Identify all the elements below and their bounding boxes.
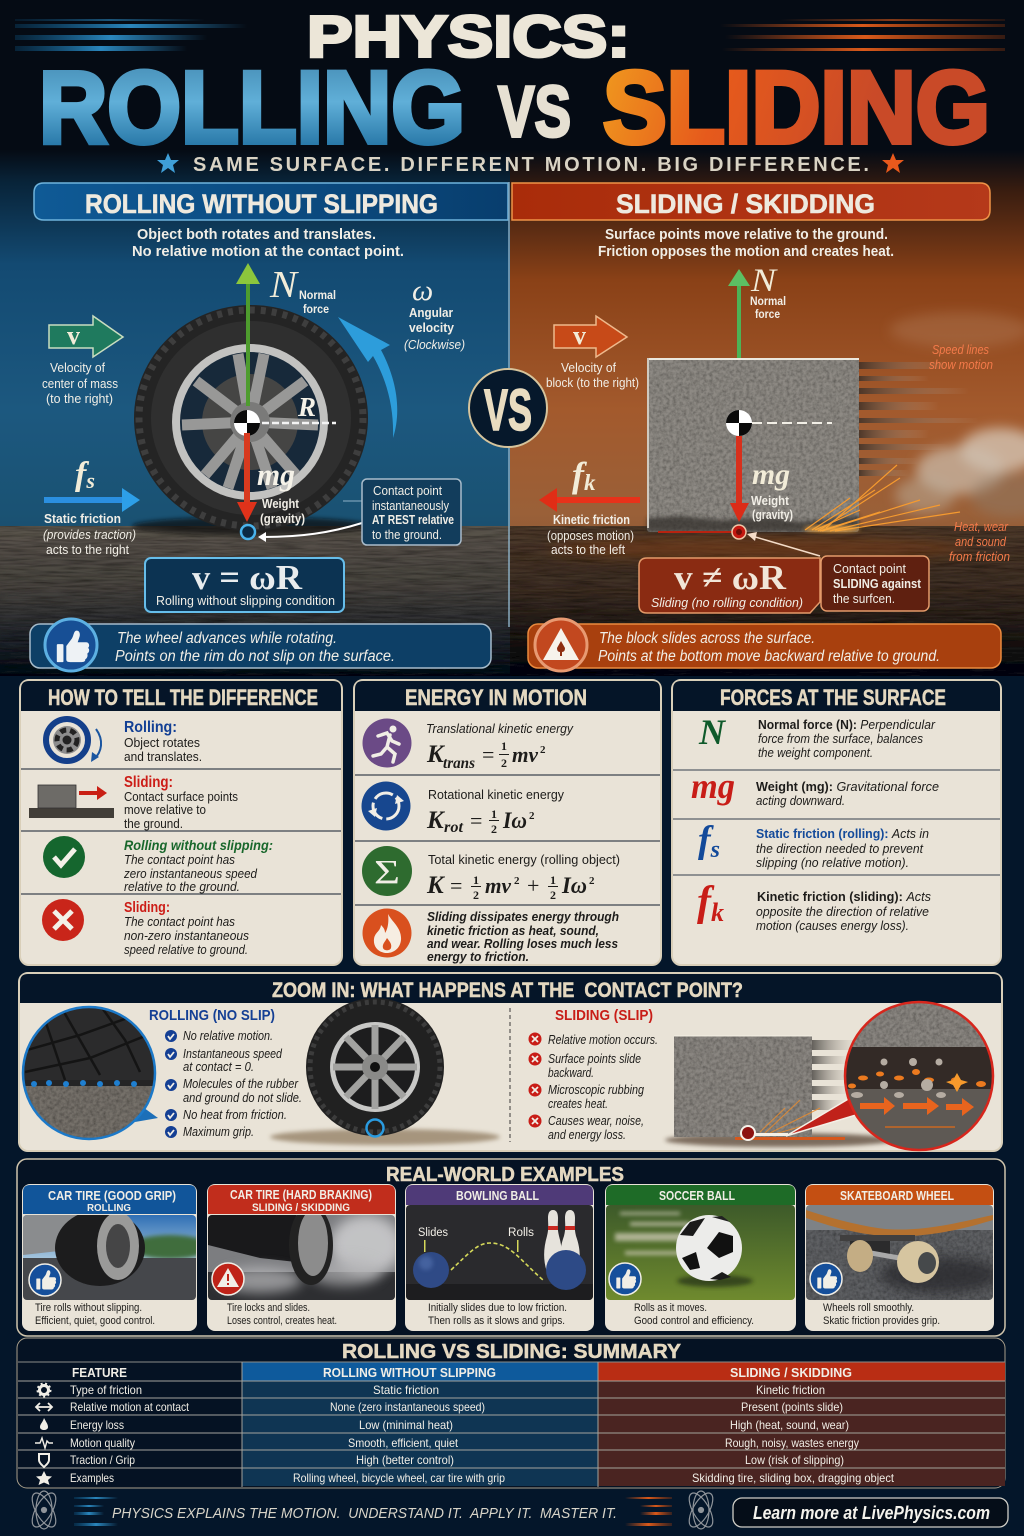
annotation: speed lines: Speed lines xyxy=(932,342,989,357)
text: sliding dissipates energy: and wear. Rolling loses much less xyxy=(427,936,618,951)
panel: rolling vs sliding summary table xyxy=(17,1338,1005,1488)
panel header: rolling without slipping xyxy=(34,183,508,220)
panel: rolling vs sliding summary table: ROLLING VS SLIDING: SUMMARY xyxy=(342,1341,682,1363)
table row: motion quality xyxy=(35,1436,859,1450)
force: weight: mg xyxy=(691,766,735,806)
contact marker and pointer xyxy=(741,1098,856,1140)
banner: block slides: The block slides across the surface. xyxy=(599,630,815,647)
hero background: rolling side xyxy=(0,150,510,676)
text: sliding: the ground. xyxy=(124,817,183,831)
table row: energy loss xyxy=(40,1418,849,1432)
annotation: heat and wear: Heat, wear xyxy=(954,519,1009,534)
panel: energy in motion xyxy=(354,680,661,965)
formula: translational kinetic energy: trans xyxy=(443,755,475,772)
callout: contact point sliding xyxy=(747,532,929,611)
list: sliding slip: SLIDING (SLIP) xyxy=(555,1007,653,1024)
arrow: normal force on block: Normal xyxy=(750,294,786,308)
arrow: normal force on wheel xyxy=(236,263,336,406)
title: SLIDING xyxy=(603,50,990,164)
annotation: speed lines xyxy=(929,342,993,372)
list: rolling no slip: ROLLING (NO SLIP) xyxy=(149,1007,275,1024)
force: normal: N xyxy=(698,712,727,752)
list: sliding slip: Causes wear, noise, xyxy=(548,1114,644,1128)
card: car tire good grip xyxy=(22,1184,210,1331)
callout: contact point at rest: to the ground. xyxy=(372,528,442,542)
list: sliding slip: Microscopic rubbing xyxy=(548,1083,644,1097)
arrow: velocity of block: v xyxy=(573,321,586,350)
table row: traction: Traction / Grip xyxy=(70,1453,135,1467)
footer: right atom xyxy=(685,1490,717,1530)
list: sliding slip xyxy=(528,1007,658,1142)
table header row: FEATURE xyxy=(72,1366,127,1380)
callout: contact point at rest: instantaneously xyxy=(372,499,450,513)
table row: relative motion: Relative motion at contact xyxy=(70,1400,190,1414)
list: rolling no slip: at contact = 0. xyxy=(183,1060,254,1074)
formula box: v not equal omega R: v ≠ ωR xyxy=(674,558,787,597)
card: car tire hard braking: Loses control, creates heat. xyxy=(227,1315,337,1327)
card: soccer ball: Rolls as it moves. xyxy=(634,1302,707,1314)
formula: rotational kinetic energy: Iω xyxy=(502,808,527,833)
formula: total kinetic energy: 2 xyxy=(514,875,520,887)
list: rolling no slip: No relative motion. xyxy=(183,1029,273,1043)
callout: contact point at rest xyxy=(258,479,461,545)
title: ROLLING xyxy=(39,50,465,164)
title: VS xyxy=(498,72,571,152)
arrow: velocity of block: block (to the right) xyxy=(546,375,639,390)
footer: learn more button xyxy=(733,1498,1008,1527)
arrow: static friction: (provides traction) xyxy=(43,527,136,542)
text: sliding: move relative to xyxy=(124,803,206,817)
formula: total kinetic energy: 1 xyxy=(473,873,479,887)
arrow: weight on wheel xyxy=(237,433,305,526)
panel: energy in motion: ENERGY IN MOTION xyxy=(405,685,587,710)
force: normal: the weight component. xyxy=(758,746,873,760)
banner: wheel advances: The wheel advances while rotating. xyxy=(117,630,337,647)
text: sliding: Sliding: xyxy=(124,774,173,791)
force: kinetic friction: motion (causes energy loss). xyxy=(756,919,909,933)
intro text: sliding: Friction opposes the motion and creates heat. xyxy=(598,243,894,260)
formula: rotational kinetic energy: Rotational kinetic energy xyxy=(428,788,565,802)
footer: learn more button: Learn more at LivePhysics.com xyxy=(753,1503,990,1523)
table row: traction: Low (risk of slipping) xyxy=(745,1453,844,1467)
text: sliding xyxy=(124,774,238,831)
formula: total kinetic energy: 2 xyxy=(473,888,479,902)
annotation: heat and wear xyxy=(949,519,1010,564)
speed lines behind block xyxy=(859,362,979,476)
force: weight xyxy=(691,766,939,808)
card: soccer ball: SOCCER BALL xyxy=(659,1189,735,1203)
center of mass marker: wheel xyxy=(234,410,260,436)
smoke cloud xyxy=(890,312,1024,517)
force: normal: force from the surface, balances xyxy=(758,732,923,746)
arrow: normal force on block: force xyxy=(755,307,780,321)
arrow: angular velocity: (Clockwise) xyxy=(404,338,465,352)
intro text: sliding: Surface points move relative to the ground. xyxy=(605,226,888,243)
force: static friction xyxy=(698,819,929,870)
force: kinetic friction: Kinetic friction (sliding): Acts xyxy=(757,889,931,904)
text: rolling: and translates. xyxy=(124,750,202,764)
icon: cross xyxy=(42,899,84,941)
text: sliding dissipates energy: Sliding dissipates energy through xyxy=(427,909,619,924)
formula: translational kinetic energy: mv xyxy=(512,742,538,767)
formula box: v = omega R: v = ωR xyxy=(192,558,303,597)
icon: check xyxy=(43,836,85,878)
table row: energy loss: Low (minimal heat) xyxy=(359,1418,453,1432)
force: kinetic friction: f xyxy=(697,879,711,925)
force: static friction: f xyxy=(698,819,711,861)
formula: total kinetic energy: mv xyxy=(485,873,511,898)
text: sliding dissipates energy: kinetic friction as heat, sound, xyxy=(427,923,599,938)
callout: contact point sliding: SLIDING against xyxy=(833,576,922,591)
card: skateboard wheel xyxy=(805,1184,1000,1331)
formula: total kinetic energy xyxy=(426,853,620,902)
formula: total kinetic energy: 2 xyxy=(550,888,556,902)
table row: examples xyxy=(36,1471,895,1485)
force: static friction: s xyxy=(710,837,720,863)
text: rolling without slipping: relative to the ground. xyxy=(124,880,240,894)
card: bowling ball: Then rolls as it slows and grips. xyxy=(428,1315,565,1327)
list: sliding slip: Surface points slide xyxy=(548,1052,641,1066)
decorative speed bars: blue xyxy=(15,19,247,51)
panel header: sliding / skidding xyxy=(512,183,990,220)
footer: left atom xyxy=(28,1490,60,1530)
banner: wheel advances: Points on the rim do not slip on the surface. xyxy=(115,648,395,665)
force: kinetic friction: opposite the direction of relative xyxy=(756,905,929,919)
magnifier: rolling contact xyxy=(20,1005,160,1146)
list: rolling no slip: and ground do not slide. xyxy=(183,1091,302,1105)
arrow: weight on wheel: mg xyxy=(257,457,295,492)
arrow: weight on block: mg xyxy=(752,458,790,491)
force: weight: acting downward. xyxy=(756,794,845,808)
arrow: velocity of center of mass xyxy=(42,316,123,406)
arrow: velocity of center of mass: center of mass xyxy=(42,376,118,391)
table row: relative motion xyxy=(36,1400,843,1414)
sparks xyxy=(804,465,960,532)
formula: total kinetic energy: Total kinetic energy (rolling object) xyxy=(428,853,620,867)
arrow: weight on block: Weight xyxy=(751,494,790,508)
table row: energy loss: High (heat, sound, wear) xyxy=(730,1418,849,1432)
table header row xyxy=(72,1366,852,1380)
card: bowling ball: Slides xyxy=(418,1227,448,1239)
table row: type of friction: Static friction xyxy=(373,1383,439,1397)
callout: contact point sliding: the surfcen. xyxy=(833,591,895,606)
card: car tire good grip: ROLLING xyxy=(87,1202,131,1214)
text: rolling: Rolling: xyxy=(124,719,177,736)
force: static friction: the direction needed to prevent xyxy=(756,842,923,856)
icon: tire xyxy=(46,719,101,762)
formula: rotational kinetic energy: K xyxy=(426,807,446,834)
arrow: angular velocity: Angular xyxy=(409,305,453,320)
formula: rotational kinetic energy: = xyxy=(470,808,482,833)
text: rolling without slipping: The contact point has xyxy=(124,853,235,867)
footer: right speed bars xyxy=(625,1497,672,1526)
panel: forces at the surface xyxy=(672,680,1001,965)
table row: energy loss: Energy loss xyxy=(70,1418,124,1432)
decorative speed bars: orange xyxy=(720,19,1005,51)
formula: rotational kinetic energy xyxy=(426,788,565,836)
arrow: kinetic friction: f xyxy=(572,455,584,495)
concrete block xyxy=(647,358,859,533)
icon: rotation arrows xyxy=(362,782,410,830)
text: rolling xyxy=(124,719,202,764)
arrow: kinetic friction: Kinetic friction xyxy=(553,512,630,527)
magnifier: sliding contact xyxy=(845,1002,995,1150)
arrow: kinetic friction: (opposes motion) xyxy=(547,528,634,543)
table row: type of friction: Type of friction xyxy=(70,1383,142,1397)
hero background: sliding side xyxy=(510,150,1024,676)
panel: real-world examples: REAL-WORLD EXAMPLES xyxy=(386,1163,624,1186)
arrow: static friction: f xyxy=(75,456,86,493)
formula box: v not equal omega R: Sliding (no rolling condition) xyxy=(651,595,803,610)
formula: rotational kinetic energy: 2 xyxy=(529,810,535,822)
panel header: rolling without slipping: ROLLING WITHOUT SLIPPING xyxy=(85,189,438,219)
card: car tire hard braking: SLIDING / SKIDDING xyxy=(252,1202,350,1214)
arrow: static friction: s xyxy=(85,468,95,493)
top dark band xyxy=(0,0,1024,160)
panel: zoom in at the contact point: ZOOM IN: WHAT HAPPENS AT THE CONTACT POINT? xyxy=(272,979,743,1002)
list: rolling no slip: Maximum grip. xyxy=(183,1125,254,1139)
VS badge xyxy=(469,369,547,447)
card: bowling ball: BOWLING BALL xyxy=(456,1189,539,1203)
arrow: velocity of block: Velocity of xyxy=(561,360,616,375)
arrow: static friction xyxy=(43,456,140,557)
arrow: normal force on wheel: force xyxy=(303,302,329,316)
formula: total kinetic energy: K xyxy=(426,872,446,899)
arrow: static friction: acts to the right xyxy=(46,542,129,557)
formula: translational kinetic energy: K xyxy=(426,741,446,768)
table row: motion quality: Rough, noisy, wastes energy xyxy=(725,1436,859,1450)
card: bowling ball xyxy=(405,1184,594,1331)
arrow: normal force on wheel: N xyxy=(269,264,300,306)
arrow: normal force on block: N xyxy=(750,263,778,299)
formula: rotational kinetic energy: rot xyxy=(444,819,464,836)
radius line and R label: R xyxy=(297,392,316,422)
card: car tire good grip: Tire rolls without slipping. xyxy=(35,1302,142,1314)
intro text: sliding xyxy=(598,226,894,260)
annotation: heat and wear: and sound xyxy=(955,534,1007,549)
text: rolling: Object rotates xyxy=(124,736,200,750)
formula box: v = omega R: Rolling without slipping condition xyxy=(156,593,335,608)
list: rolling no slip: Molecules of the rubber xyxy=(183,1077,299,1091)
arrow: kinetic friction: k xyxy=(584,470,596,495)
banner: wheel advances xyxy=(30,619,491,671)
table row: traction: High (better control) xyxy=(356,1453,454,1467)
force: static friction: slipping (no relative motion). xyxy=(756,856,909,870)
formula box: v = omega R xyxy=(145,558,344,612)
formula: translational kinetic energy: = xyxy=(482,742,494,767)
card: car tire hard braking: CAR TIRE (HARD BRAKING) xyxy=(230,1187,372,1202)
radius line and R label xyxy=(262,392,336,423)
card: car tire good grip: Efficient, quiet, good control. xyxy=(35,1315,155,1327)
table header row: ROLLING WITHOUT SLIPPING xyxy=(323,1366,496,1380)
table row: type of friction: Kinetic friction xyxy=(756,1383,825,1397)
center of mass marker: block xyxy=(726,410,832,436)
footer: tagline: PHYSICS EXPLAINS THE MOTION. UNDERSTAND IT. APPLY IT. MASTER IT. xyxy=(112,1505,617,1522)
title: PHYSICS: xyxy=(307,4,630,70)
card: bowling ball: Initially slides due to low friction. xyxy=(428,1302,567,1314)
arrow: velocity of block xyxy=(546,316,639,390)
VS badge: VS xyxy=(484,378,532,443)
text: sliding contact: non-zero instantaneous xyxy=(124,929,249,943)
arrow: kinetic friction xyxy=(539,455,640,557)
arrow: velocity of center of mass: Velocity of xyxy=(50,360,105,375)
force: normal: Normal force (N): Perpendicular xyxy=(758,718,936,732)
table row: relative motion: Present (points slide) xyxy=(741,1400,843,1414)
force: kinetic friction: k xyxy=(711,898,724,927)
intro text: rolling xyxy=(132,226,404,260)
text: rolling without slipping: Rolling without slipping: xyxy=(124,837,273,853)
text: sliding contact: The contact point has xyxy=(124,915,235,929)
card: car tire hard braking xyxy=(207,1184,402,1331)
banner: block slides xyxy=(528,619,1001,671)
title xyxy=(39,4,990,164)
card: bowling ball: Rolls xyxy=(508,1227,534,1239)
banner: block slides: Points at the bottom move backward relative to ground. xyxy=(598,648,940,665)
list: sliding slip: and energy loss. xyxy=(548,1128,626,1142)
panel: real-world examples xyxy=(17,1159,1005,1336)
panel: zoom in at the contact point xyxy=(19,973,1002,1151)
text: sliding contact xyxy=(124,899,249,957)
card: car tire good grip: CAR TIRE (GOOD GRIP) xyxy=(48,1188,176,1203)
contact point: wheel xyxy=(241,525,255,539)
panel: forces at the surface: FORCES AT THE SURFACE xyxy=(720,685,946,710)
arrow: normal force on wheel: Normal xyxy=(299,288,336,302)
arrow: angular velocity: ω xyxy=(412,274,433,307)
table row: examples: Examples xyxy=(70,1471,114,1485)
text: rolling without slipping xyxy=(123,837,273,894)
table row: examples: Rolling wheel, bicycle wheel, car tire with grip xyxy=(293,1471,505,1485)
list: sliding slip: creates heat. xyxy=(548,1097,608,1111)
formula: total kinetic energy: = xyxy=(450,873,462,898)
block illustration with sparks xyxy=(665,1035,895,1147)
callout: contact point sliding: Contact point xyxy=(833,561,906,576)
footer: left speed bars xyxy=(74,1497,118,1526)
arrow: normal force on block xyxy=(728,263,786,358)
table header row: SLIDING / SKIDDING xyxy=(730,1366,852,1380)
arrow: weight on wheel: Weight xyxy=(262,497,300,511)
text: sliding dissipates energy xyxy=(427,909,619,964)
card: skateboard wheel: Skatic friction provides grip. xyxy=(823,1315,940,1327)
list: rolling no slip: Instantaneous speed xyxy=(183,1047,283,1061)
text: sliding dissipates energy: energy to friction. xyxy=(427,949,529,964)
force: static friction: Static friction (rolling): Acts in xyxy=(756,826,929,841)
table row: motion quality: Motion quality xyxy=(70,1436,135,1450)
list: rolling no slip xyxy=(149,1007,302,1139)
formula: translational kinetic energy xyxy=(426,722,574,772)
arrow: velocity of center of mass: v xyxy=(67,321,80,350)
list: rolling no slip: No heat from friction. xyxy=(183,1108,287,1122)
arrow: weight on wheel: (gravity) xyxy=(260,512,305,526)
wheel with tire and rim xyxy=(132,305,372,535)
text: sliding: Contact surface points xyxy=(124,790,238,804)
formula box: v not equal omega R xyxy=(639,558,820,613)
icon: sigma: Σ xyxy=(374,854,400,891)
icon: runner xyxy=(362,718,412,768)
panel header: sliding / skidding: SLIDING / SKIDDING xyxy=(616,189,875,219)
card: skateboard wheel: SKATEBOARD WHEEL xyxy=(840,1189,954,1203)
panel: how to tell the difference: HOW TO TELL THE DIFFERENCE xyxy=(48,685,318,710)
list: sliding slip: Relative motion occurs. xyxy=(548,1033,658,1047)
force: weight: Weight (mg): Gravitational force xyxy=(756,779,939,794)
card: skateboard wheel: Wheels roll smoothly. xyxy=(823,1302,914,1314)
text: sliding contact: Sliding: xyxy=(124,899,170,916)
arrows: surface motion xyxy=(860,1097,974,1116)
force: normal xyxy=(698,712,936,760)
formula: total kinetic energy: Iω xyxy=(561,873,587,898)
arrow: angular velocity: velocity xyxy=(409,320,455,335)
panel: how to tell the difference xyxy=(20,680,342,965)
table row: type of friction xyxy=(38,1383,825,1397)
formula: total kinetic energy: 2 xyxy=(589,875,595,887)
table row: relative motion: None (zero instantaneous speed) xyxy=(330,1400,485,1414)
formula: translational kinetic energy: 2 xyxy=(501,756,507,770)
table row: traction xyxy=(39,1453,844,1467)
intro text: rolling: Object both rotates and translates. xyxy=(137,226,376,243)
arrow: weight on block xyxy=(730,436,793,522)
force: kinetic friction xyxy=(697,879,931,933)
formula: rotational kinetic energy: 1 xyxy=(491,807,497,821)
formula: total kinetic energy: + xyxy=(527,873,539,898)
card: soccer ball: Good control and efficiency. xyxy=(634,1315,754,1327)
intro text: rolling: No relative motion at the contact point. xyxy=(132,243,404,260)
arrow: weight on block: (gravity) xyxy=(752,508,793,522)
formula: translational kinetic energy: Translational kinetic energy xyxy=(426,722,574,736)
text: sliding contact: speed relative to ground. xyxy=(124,943,248,957)
tagline: SAME SURFACE. DIFFERENT MOTION. BIG DIFFERENCE. xyxy=(193,154,869,176)
table row: motion quality: Smooth, efficient, quiet xyxy=(348,1436,459,1450)
annotation: speed lines: show motion xyxy=(929,357,993,372)
callout: contact point at rest: AT REST relative xyxy=(372,513,454,527)
wheel illustration xyxy=(270,998,500,1145)
arrow: kinetic friction: acts to the left xyxy=(551,542,625,557)
contact point: block xyxy=(732,525,746,539)
arrow: static friction: Static friction xyxy=(44,511,121,526)
table row: examples: Skidding tire, sliding box, dragging object xyxy=(692,1471,895,1485)
arrow: velocity of center of mass: (to the right) xyxy=(46,391,113,406)
list: sliding slip: backward. xyxy=(548,1066,594,1080)
icon: flame xyxy=(362,908,412,958)
formula: translational kinetic energy: 2 xyxy=(540,744,546,756)
callout: contact point at rest: Contact point xyxy=(373,484,442,498)
icon: sigma xyxy=(362,846,412,896)
card: car tire hard braking: Tire locks and slides. xyxy=(227,1302,310,1314)
annotation: heat and wear: from friction xyxy=(949,549,1010,564)
center divider xyxy=(508,182,510,627)
card: soccer ball xyxy=(605,1184,796,1331)
formula: total kinetic energy: 1 xyxy=(550,873,556,887)
formula: rotational kinetic energy: 2 xyxy=(491,822,497,836)
arrow: angular velocity xyxy=(338,274,465,438)
text: rolling without slipping: zero instantaneous speed xyxy=(123,867,258,881)
formula: translational kinetic energy: 1 xyxy=(501,739,507,753)
icon: sliding block xyxy=(29,785,114,818)
